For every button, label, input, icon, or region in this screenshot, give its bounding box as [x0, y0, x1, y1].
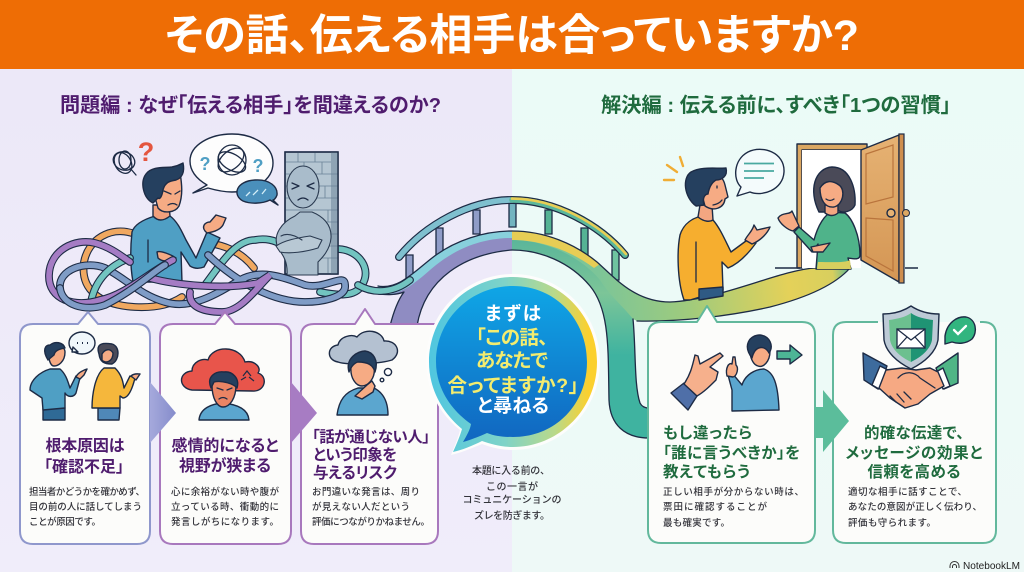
card body text	[312, 486, 430, 528]
panel: ask who to tell card	[648, 306, 815, 543]
callout: central question bubble: と尋ねる	[477, 395, 549, 417]
card heading: 的確な伝達で、	[864, 423, 964, 442]
bridge connecting problem and solution	[378, 199, 850, 438]
illustration: woman in green sweater	[778, 167, 860, 269]
illustration: smiling man in yellow sweater	[678, 168, 770, 300]
icon: confused speech bubble	[190, 134, 273, 193]
icon: yellow excitement rays	[664, 157, 683, 180]
card heading: 「話が通じない人」	[312, 427, 430, 446]
icon: scribble and red question mark: ?	[138, 137, 154, 167]
card body text	[171, 486, 279, 528]
panel: risk card: 与えるリスク	[313, 464, 397, 482]
panel: risk card: という印象を	[313, 445, 397, 464]
card heading: 感情的になると	[172, 436, 278, 455]
logo: NotebookLM: NotebookLM	[963, 560, 1020, 572]
card body text: あなたの意図が正しく伝わり、	[848, 501, 982, 513]
card body text	[663, 486, 804, 529]
heading: problem section: 問題編 : なぜ「伝える相手」を間違えるのか?	[60, 94, 441, 117]
callout: central question bubble: まずは	[485, 303, 541, 324]
icon: message speech bubble	[736, 149, 784, 196]
panel: root cause card	[20, 312, 150, 544]
card body text: 票田に確認することが	[663, 501, 767, 513]
card heading: もし違ったら	[663, 423, 752, 442]
card body text: 立っている時、衝動的に	[171, 501, 279, 513]
background: problem side	[0, 69, 512, 572]
callout caption: コミュニケーションの	[462, 494, 562, 506]
card body text: 心に余裕がない時や腹が	[171, 486, 279, 498]
illustration: frustrated man	[131, 163, 226, 282]
illustration: brick wall	[285, 152, 338, 274]
callout caption	[462, 464, 562, 522]
bridge posts	[406, 203, 619, 285]
card body text: 担当者かどうかを確かめず、	[29, 486, 145, 498]
card body text: 最も確実です。	[663, 517, 730, 529]
card body text: 評価も守られます。	[848, 517, 936, 529]
card body text	[848, 486, 982, 529]
panel: emotional narrowing card: 視野が狭まる	[179, 456, 271, 475]
handrail	[399, 200, 625, 257]
bridge deck left	[378, 231, 512, 326]
callout caption: この一言が	[486, 480, 538, 493]
illustration: front tangled ropes	[49, 242, 345, 312]
card body text: お門違いな発言は、周り	[312, 486, 420, 498]
panel: effective delivery card	[833, 306, 996, 543]
icon: confused speech bubble: ?	[200, 154, 210, 174]
icon: scribble and red question mark	[111, 137, 154, 177]
arrow: emotion to risk	[291, 382, 317, 443]
card body text: が見えない人だという	[312, 501, 410, 513]
card body text: 目の前の人に話してしまう	[29, 501, 142, 513]
icon: small blue speech bubble	[237, 180, 278, 205]
heading: solution section: 解決編 : 伝える前に、すべき「1つの習慣」	[601, 94, 951, 117]
illustration: angry person with red cloud	[182, 349, 264, 420]
callout caption: 本題に入る前の、	[472, 464, 550, 477]
illustration: tangled ropes behind figures	[83, 231, 410, 307]
illustration: two people talking	[30, 332, 140, 420]
panel: risk card	[301, 309, 438, 544]
panel: ask who to tell card: 教えてもらう	[663, 462, 750, 481]
callout caption: ズレを防ぎます。	[474, 509, 550, 522]
card body text: 発言しがちになります。	[171, 516, 279, 528]
title banner	[0, 0, 1024, 69]
title banner: その話、伝える相手は合っていますか?	[165, 12, 859, 60]
card body text: 適切な相手に話すことで、	[848, 486, 967, 498]
panel: emotional narrowing card	[160, 312, 291, 544]
illustration: shield, envelope and handshake	[863, 306, 975, 408]
arrow: root cause to emotion	[150, 382, 176, 443]
illustration: doorway	[775, 134, 918, 283]
card body text: 正しい相手が分からない時は、	[663, 486, 804, 498]
bridge deck right and road to door	[512, 231, 850, 438]
panel: ask who to tell card: 「誰に言うべきか」を	[663, 444, 800, 462]
card body text: 評価につながりかねません。	[312, 516, 430, 528]
arrow: ask to delivery	[815, 390, 849, 452]
icon: confused speech bubble: ?	[252, 156, 264, 176]
illustration: worried person under grey cloud	[329, 331, 397, 415]
card body text	[29, 486, 145, 528]
card body text: ことが原因です。	[29, 516, 101, 528]
callout: central question bubble: 「この話、	[476, 327, 548, 349]
illustration: pointing hand and person	[671, 335, 802, 411]
callout: central question bubble: あなたで	[476, 350, 548, 372]
panel: effective delivery card: 信頼を高める	[868, 463, 960, 481]
panel: effective delivery card: メッセージの効果と	[846, 444, 983, 462]
illustration: stone-faced listener	[276, 166, 331, 275]
callout: central question bubble	[426, 274, 600, 455]
panel: root cause card: 「確認不足」	[44, 457, 124, 476]
background: solution side	[512, 69, 1024, 572]
card heading: 根本原因は	[46, 437, 125, 455]
callout: central question bubble: 合ってますか?」	[448, 375, 578, 397]
